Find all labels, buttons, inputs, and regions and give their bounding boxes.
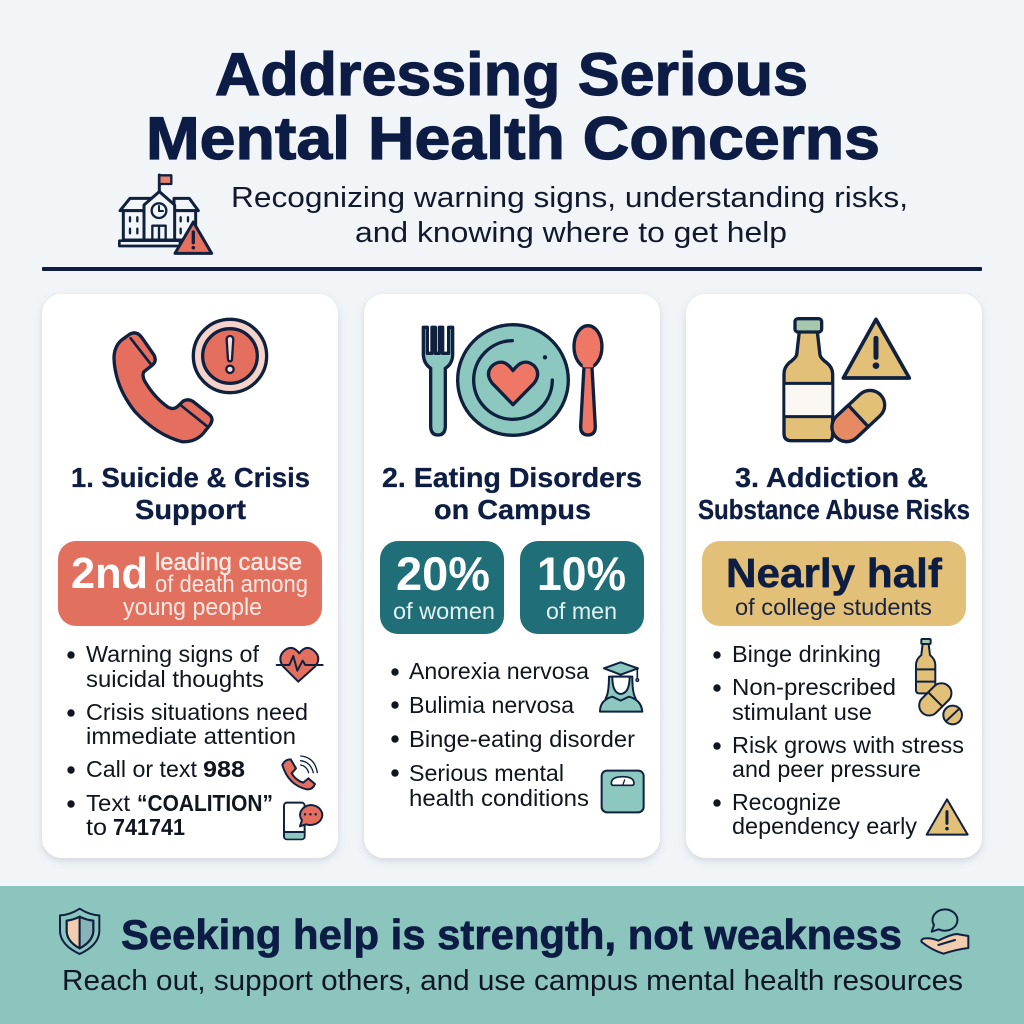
stat: 10% of men [520,541,644,634]
panel: footer banner [0,886,1024,1024]
icon: bottle, warning triangle and pill [784,319,909,448]
list: substance risks: Non-prescribed [732,674,896,700]
stat: 20% of women: 20% [396,547,490,600]
icon: heart with pulse [277,648,323,682]
callout: nearly half of college students: of college students [735,594,932,620]
list: eating disorder types [391,658,635,811]
heading: 2. Eating Disorders [382,462,642,493]
list: eating disorder types: Anorexia nervosa [409,658,590,684]
callout: nearly half of college students: Nearly half [726,550,942,596]
icon: small warning triangle [927,799,968,835]
stat: 20% of women: of women [393,598,495,624]
list: warning signs and contacts: to [86,814,107,840]
list: substance risks: Risk grows with stress [732,732,964,758]
subtitle: Recognizing warning signs, understanding risks, [231,182,908,214]
subtitle: and knowing where to get help [355,217,787,249]
callout: 2nd leading cause: young people [123,594,262,621]
heading: Substance Abuse Risks [698,494,970,525]
list: substance risks: stimulant use [732,699,872,725]
list: substance risks: Recognize [732,789,841,815]
heading [71,462,310,525]
heading: 1. Suicide & Crisis [71,462,310,493]
callout: 2nd leading cause: of death among [155,571,308,598]
list: warning signs and contacts: suicidal thoughts [86,666,264,692]
callout: nearly half of college students [702,541,966,626]
list: substance risks: Binge drinking [732,641,881,667]
panel: addiction and substance abuse risks [686,294,982,858]
heading: 3. Addiction & [735,462,928,493]
list: warning signs and contacts: “COALITION” [137,790,273,816]
callout: 2nd leading cause: 2nd [71,549,148,598]
list: warning signs and contacts [67,641,308,840]
list: substance risks: and peer pressure [732,756,921,782]
icon: school with warning triangle [119,175,212,253]
panel: eating disorders on campus [364,294,660,858]
list: warning signs and contacts: Text [86,790,130,816]
title [146,41,880,172]
list: warning signs and contacts: Crisis situations need [86,699,308,725]
list: warning signs and contacts: 741741 [113,814,185,840]
footer text: Reach out, support others, and use campus mental health resources [62,965,963,997]
list: eating disorder types: Serious mental [409,760,564,786]
icon: small bottle and pills [915,639,962,724]
callout: 2nd leading cause [58,541,322,626]
icon: telephone with alert [114,319,267,442]
icon: plate with heart, fork and spoon [423,325,602,435]
list: warning signs and contacts: 988 [203,756,245,782]
list: substance risks: dependency early [732,813,917,839]
icon: weighing scale [602,771,644,812]
list: substance risks [713,641,964,839]
list: warning signs and contacts: Call or text [86,756,197,782]
callout: 2nd leading cause: leading cause [155,549,302,576]
list: warning signs and contacts: immediate attention [86,723,296,749]
title: Mental Health Concerns [146,105,880,172]
footer heading: Seeking help is strength, not weakness [121,911,902,958]
icon: graduate [600,662,642,712]
stat: 10% of men: 10% [537,547,626,600]
list: eating disorder types: Bulimia nervosa [409,692,575,718]
heading [382,462,642,525]
list: eating disorder types: health conditions [409,785,589,811]
icon: smartphone with chat bubble [284,803,322,839]
stat: 20% of women [380,541,504,634]
icon: shield [60,909,99,954]
subtitle [231,182,908,249]
heading: Support [135,494,246,525]
heading [698,462,970,525]
panel: suicide and crisis support [42,294,338,858]
stat: 10% of men: of men [546,598,617,624]
list: warning signs and contacts: Warning signs of [86,641,259,667]
icon: hand with speech bubble [921,909,968,954]
icon: phone with signal [282,756,317,789]
list: eating disorder types: Binge-eating disorder [409,726,635,752]
heading: on Campus [434,494,591,525]
title: Addressing Serious [215,41,808,108]
